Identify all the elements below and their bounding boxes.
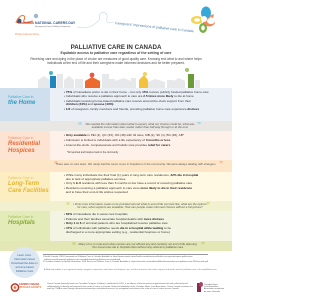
quote marks left: “ xyxy=(66,201,70,210)
callout circle: learn more: Learn more. xyxy=(17,254,32,257)
panel: residential hospices: • Around-the-clock, compassionate and holistic care provides relief for carers xyxy=(64,143,170,147)
references: palliative-care/framework-palliative-care-canada/framework-palliative-care-canada.pdf xyxy=(44,258,120,260)
quote marks right: ” xyxy=(219,160,223,169)
panel: home: • 75% of Canadians prefer to die in their home – but only 15% receive publicly funded palliative home care xyxy=(64,90,209,94)
logo subtitle: Recognizing Carers. Building Compassion xyxy=(35,26,70,28)
quote text: available sooner than later, earlier rather than half way through or at the end. xyxy=(92,125,188,129)
home bullets xyxy=(64,90,209,111)
quote band: hospitals xyxy=(0,241,232,251)
footer logo: partner: Care Association xyxy=(204,286,218,288)
panel: home: • 1/3 of caregivers, family members and friends, providing palliative home care experience distress xyxy=(64,107,199,111)
quote text: Many of us in rural and urban centres are not offered any and certainly not end of life planning. xyxy=(79,242,197,246)
references xyxy=(43,254,208,264)
quote text xyxy=(85,122,195,129)
panel: hospitals xyxy=(0,211,232,241)
panel: long-term care: • While many individuals live their final (1) years in long-term care residences, 22% die in hospital xyxy=(64,173,198,177)
tagline: curved: Caregivers' impressions of palliative care in Canada xyxy=(115,21,194,33)
quote text: I think more information needs to be provided around what to end of life can look like, what are the options xyxy=(73,202,207,206)
quote marks left: “ xyxy=(54,160,58,169)
swoosh line xyxy=(77,12,114,28)
callout circle: learn more: Information sheet xyxy=(14,258,35,261)
quote marks right: ” xyxy=(197,121,201,130)
panel: long-term care: • Only 1 in 6 residents with less than 6 months to live have a record of receiving palliative care xyxy=(64,181,192,185)
footer text: Carers Canada (formerly known as Canadian Caregiver Coalition), established in 1992, is an alliance of diverse partner organizations that work collectively and xyxy=(47,283,188,285)
footer logo: partner xyxy=(197,282,224,293)
hospices side label xyxy=(0,131,50,160)
LTC bullets xyxy=(64,173,198,194)
icon: orange house xyxy=(85,73,100,88)
icon: flower logo xyxy=(191,6,215,33)
icon: National Carers Day logo xyxy=(16,14,38,24)
header: logos and tagline xyxy=(16,6,215,33)
quote band: hospices xyxy=(0,160,232,172)
quote text: for care, what supports are available. How can people make informed choices without a full picture? xyxy=(77,205,203,209)
footer logo: Carers Canada xyxy=(10,283,42,292)
hashtag: #NationalCarersDay xyxy=(15,33,39,36)
callout circle: learn more: Palliative Care xyxy=(16,270,33,273)
quote band: long-term care xyxy=(0,201,232,211)
hospitals side label: Hospitals xyxy=(8,220,35,226)
panel: residential hospices xyxy=(0,131,232,160)
home side label: Palliative Care in xyxy=(8,95,33,99)
link line: A Web-only edition is our signature family caregiver's experience with home and hospice care, and the outcome, their work, impacts and what's next for palliative care: cihi.ca/palliative-care xyxy=(44,269,217,271)
intro text: Receiving care and dying in the place of choice are measures of good quality care. Knowing end what to and where helps xyxy=(30,57,202,61)
panel: hospitals: discharged to a more appropriate setting (e.g., residential hospices or home) xyxy=(66,230,170,234)
title: PALLIATIVE CARE IN CANADA xyxy=(71,44,161,50)
subtitle: Equitable access to palliative care regardless of the setting of care xyxy=(61,51,171,55)
quote marks left: “ xyxy=(78,121,82,130)
LTC side label xyxy=(0,172,50,201)
footer logo: partner: Canadian Home xyxy=(204,284,218,286)
panel: home: • Individuals receiving home-based palliative care receive around-the-clock support from their xyxy=(64,99,191,103)
panel: residential hospices: • Only available in PEI (1), QC (33), ON (48) with 32 sites, MB (2), SK (1), BC (48), AB* xyxy=(64,133,184,137)
panel: home xyxy=(0,88,232,121)
footer text: work by CCHA to raise through connected partnerships and political process, the recognition and enhance the value of carers' voices across Canada. xyxy=(47,288,179,290)
footer text: collaboratively to identify and respond to the needs of carers in Canada. Under the leadership of the Canadian Home Care Association, Carers Canada continues the xyxy=(47,286,193,288)
hospices bullets xyxy=(64,133,184,154)
quote band: home xyxy=(0,121,232,131)
quote marks right: ” xyxy=(206,201,210,210)
panel: hospitals: • Patients and their families associate hospital deaths with more distress xyxy=(64,217,164,221)
quote text: Our loved ones die in hospital often without any referral to palliative care. xyxy=(92,245,184,249)
callout circle: learn more: Download the data on xyxy=(11,262,38,265)
footer logo: partner: de soins à domicile xyxy=(204,291,220,293)
LTC side label: Palliative Care in xyxy=(8,176,33,180)
hospices side label: Palliative Care in xyxy=(8,136,33,140)
footer text xyxy=(47,282,193,290)
home side label: the Home xyxy=(8,100,35,106)
icon: yellow house xyxy=(139,72,148,88)
home side label xyxy=(0,88,50,121)
panel: hospitals: • 47% of individuals with palliative needs die in a hospital while waiting to be xyxy=(64,226,171,230)
quote text: We needed the information about what to expect, what our choices could be, what was xyxy=(85,122,195,126)
panel: residential hospices: *All reported and hospice beds in the community xyxy=(67,150,118,154)
footer logo: partner: Association canadienne xyxy=(204,288,224,290)
quote text xyxy=(78,242,197,249)
callout circle: learn more xyxy=(9,247,40,278)
hospices side label: Hospices xyxy=(8,148,35,154)
icon: green tower xyxy=(185,68,194,88)
panel: residential hospices: • Admission is limited to individuals with a life expectancy of 3 months or less xyxy=(64,138,170,142)
skyline illustration xyxy=(38,68,200,88)
panel: long-term care: due to lack of appropriate palliative services xyxy=(66,177,125,181)
footer logo: Carers Canada: PROCHES AIDANTS xyxy=(19,287,41,289)
quote marks right: ” xyxy=(201,241,205,250)
panel: hospitals: • 62% of Canadians die in acute care hospitals xyxy=(64,212,128,216)
LTC side label: Long-Term xyxy=(8,181,39,187)
icon: blue building xyxy=(49,71,56,88)
references: 2 Canadian Institute for Health Information, 2018. Access to Palliative Care in Canada. Available at: https://www.cihi.ca/sites/default/files/document/access-palliative-care-2018-en-web.pdf xyxy=(43,261,208,263)
quote marks left: “ xyxy=(72,241,76,250)
footer logo: Carers Canada: CARERS CANADA xyxy=(19,284,39,286)
hospitals side label: Palliative Care in xyxy=(8,215,33,219)
quote text: There was no care team. We rarely had the same nurse in hospital or in the community. We were always dealing with strangers. xyxy=(56,162,216,166)
logo text: National Carers Day: NATIONAL CARERS DAY xyxy=(35,21,75,25)
hospices side label: Residential xyxy=(8,141,40,147)
panel: home: • Individuals who receive a palliative approach to care are 2.5 times more likely to die at home xyxy=(64,94,194,98)
panel: hospitals: • Only 1 in 6 of terminal patients who are hospitalized receive palliative care xyxy=(64,221,168,225)
hospitals bullets xyxy=(64,212,171,234)
panel: long-term care: and to have their end-of-life wishes respected xyxy=(66,190,128,194)
LTC side label: Care Facilities xyxy=(8,188,49,194)
panel: long-term care xyxy=(0,172,232,201)
intro text xyxy=(30,57,202,65)
panel: home: children (44%) and spouse (43%) xyxy=(66,102,113,106)
intro text: individuals at the end of life and their caregivers make informed decisions and be better prepared. xyxy=(47,61,185,65)
references: 1 Health Canada, 2018. Framework on Palliative Care in Canada. Available at: https://www.canada.ca/en/health-canada/services/health-care-system/reports-publications xyxy=(43,256,192,258)
callout circle: learn more: at-home-based xyxy=(15,266,34,269)
quote text xyxy=(73,202,207,209)
panel: long-term care: • Residents receiving a palliative approach to care were more likely to die in their residence xyxy=(64,186,192,190)
hospitals side label xyxy=(0,211,50,241)
